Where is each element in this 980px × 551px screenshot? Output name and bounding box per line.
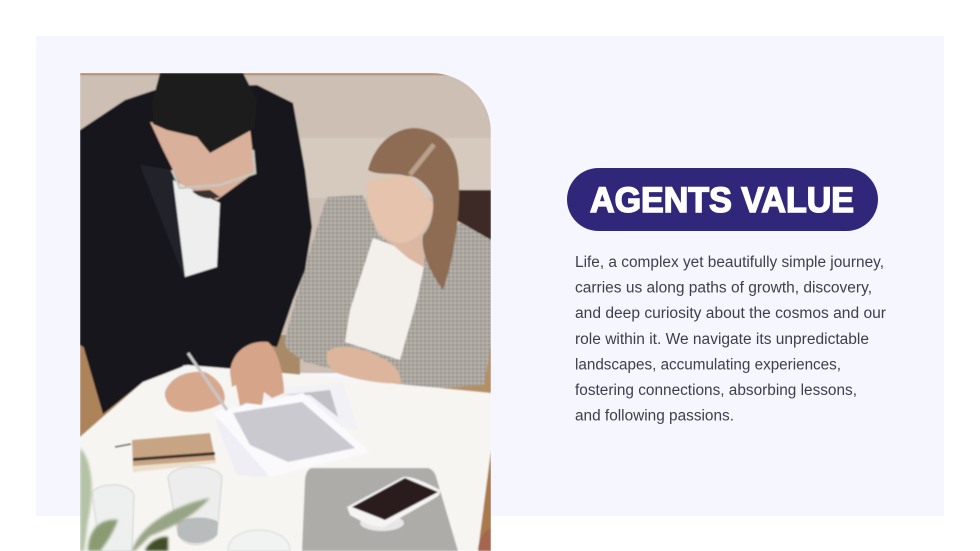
woman's face [367, 176, 434, 243]
body paragraph: landscapes, accumulating experiences, [575, 356, 841, 373]
woman's hair [368, 128, 459, 290]
pen [188, 353, 227, 410]
woman's clasped hands [326, 347, 401, 383]
body paragraph [575, 254, 886, 425]
body paragraph: role within it. We navigate its unpredictable [575, 331, 869, 348]
printed text block [233, 402, 355, 462]
table top [80, 365, 491, 551]
second printed block [283, 390, 338, 417]
man's left hand [230, 342, 284, 406]
body paragraph: Life, a complex yet beautifully simple journey, [575, 254, 884, 271]
man's face [150, 122, 255, 200]
phone and charger [360, 518, 404, 532]
man [80, 73, 312, 414]
woman's shirt [345, 238, 424, 360]
wooden floor [80, 344, 142, 438]
stacked papers [215, 420, 270, 477]
woman's blazer [284, 195, 491, 388]
man's jacket [80, 85, 312, 392]
photo: two colleagues reviewing a document at a table [80, 73, 491, 551]
body paragraph: and deep curiosity about the cosmos and our [575, 305, 886, 322]
notebook [132, 433, 216, 472]
man's trousers [83, 338, 256, 414]
man's writing hand [165, 372, 225, 412]
water glasses [92, 467, 290, 551]
woman [284, 128, 491, 388]
plant [80, 448, 210, 551]
laptop [302, 468, 458, 551]
heading text: AGENTS VALUE [590, 181, 854, 220]
man's hair [152, 73, 257, 153]
man's cuff [182, 364, 186, 368]
body paragraph: fostering connections, absorbing lessons, [575, 382, 857, 399]
woman's neck [388, 234, 426, 268]
body paragraph: and following passions. [575, 408, 734, 425]
dark sofa [456, 190, 491, 240]
hand at lower right edge [478, 528, 491, 551]
heading pill [567, 168, 878, 231]
man's glasses [172, 150, 255, 188]
wall [80, 73, 491, 373]
man's shirt [173, 180, 220, 277]
body paragraph: carries us along paths of growth, discovery, [575, 280, 872, 297]
